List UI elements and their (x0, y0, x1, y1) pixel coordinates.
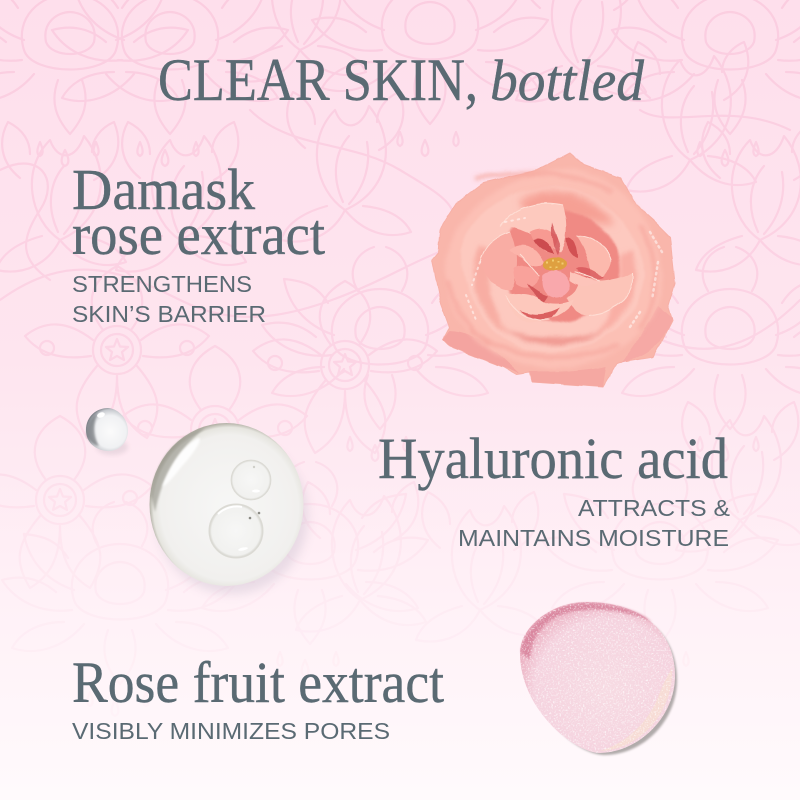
description: attracts and maintains moisture: MAINTAINS MOISTURE (458, 525, 729, 551)
image: damask rose (432, 153, 675, 387)
description: attracts and maintains moisture (458, 495, 730, 551)
heading: damask rose extract: rose extract (72, 202, 325, 267)
centre petals (542, 271, 570, 298)
text block: damask rose extract (72, 157, 325, 327)
text block: hyaluronic acid (378, 426, 730, 551)
image: hyaluronic acid serum pool (150, 423, 308, 594)
description: strengthens skin's barrier: SKIN’S BARRIER (72, 301, 266, 327)
image: serum droplet (86, 408, 128, 455)
heading: damask rose extract (72, 157, 325, 267)
description: strengthens skin's barrier (72, 271, 266, 327)
dark seams (520, 222, 604, 320)
heading: hyaluronic acid: Hyaluronic acid (378, 426, 728, 491)
rose dew droplets (466, 218, 662, 330)
heading: damask rose extract: Damask (72, 157, 255, 222)
bubble: lower (209, 504, 263, 558)
petal edges (480, 203, 632, 320)
description: strengthens skin's barrier: STRENGTHENS (72, 271, 252, 297)
floral line-art background pattern (0, 0, 800, 551)
description: attracts and maintains moisture: ATTRACTS & (578, 495, 730, 521)
heading: rose fruit extract: Rose fruit extract (72, 650, 444, 715)
middle petals (500, 203, 566, 252)
description: visibly minimizes pores: VISIBLY MINIMIZES PORES (72, 718, 390, 744)
title: bottled (490, 48, 645, 113)
image: rose fruit scrub swatch (515, 597, 680, 757)
title: CLEAR SKIN, (158, 47, 478, 113)
text block: rose fruit extract (72, 650, 444, 744)
inner dark bed (502, 210, 620, 322)
bubble: upper (231, 460, 271, 500)
